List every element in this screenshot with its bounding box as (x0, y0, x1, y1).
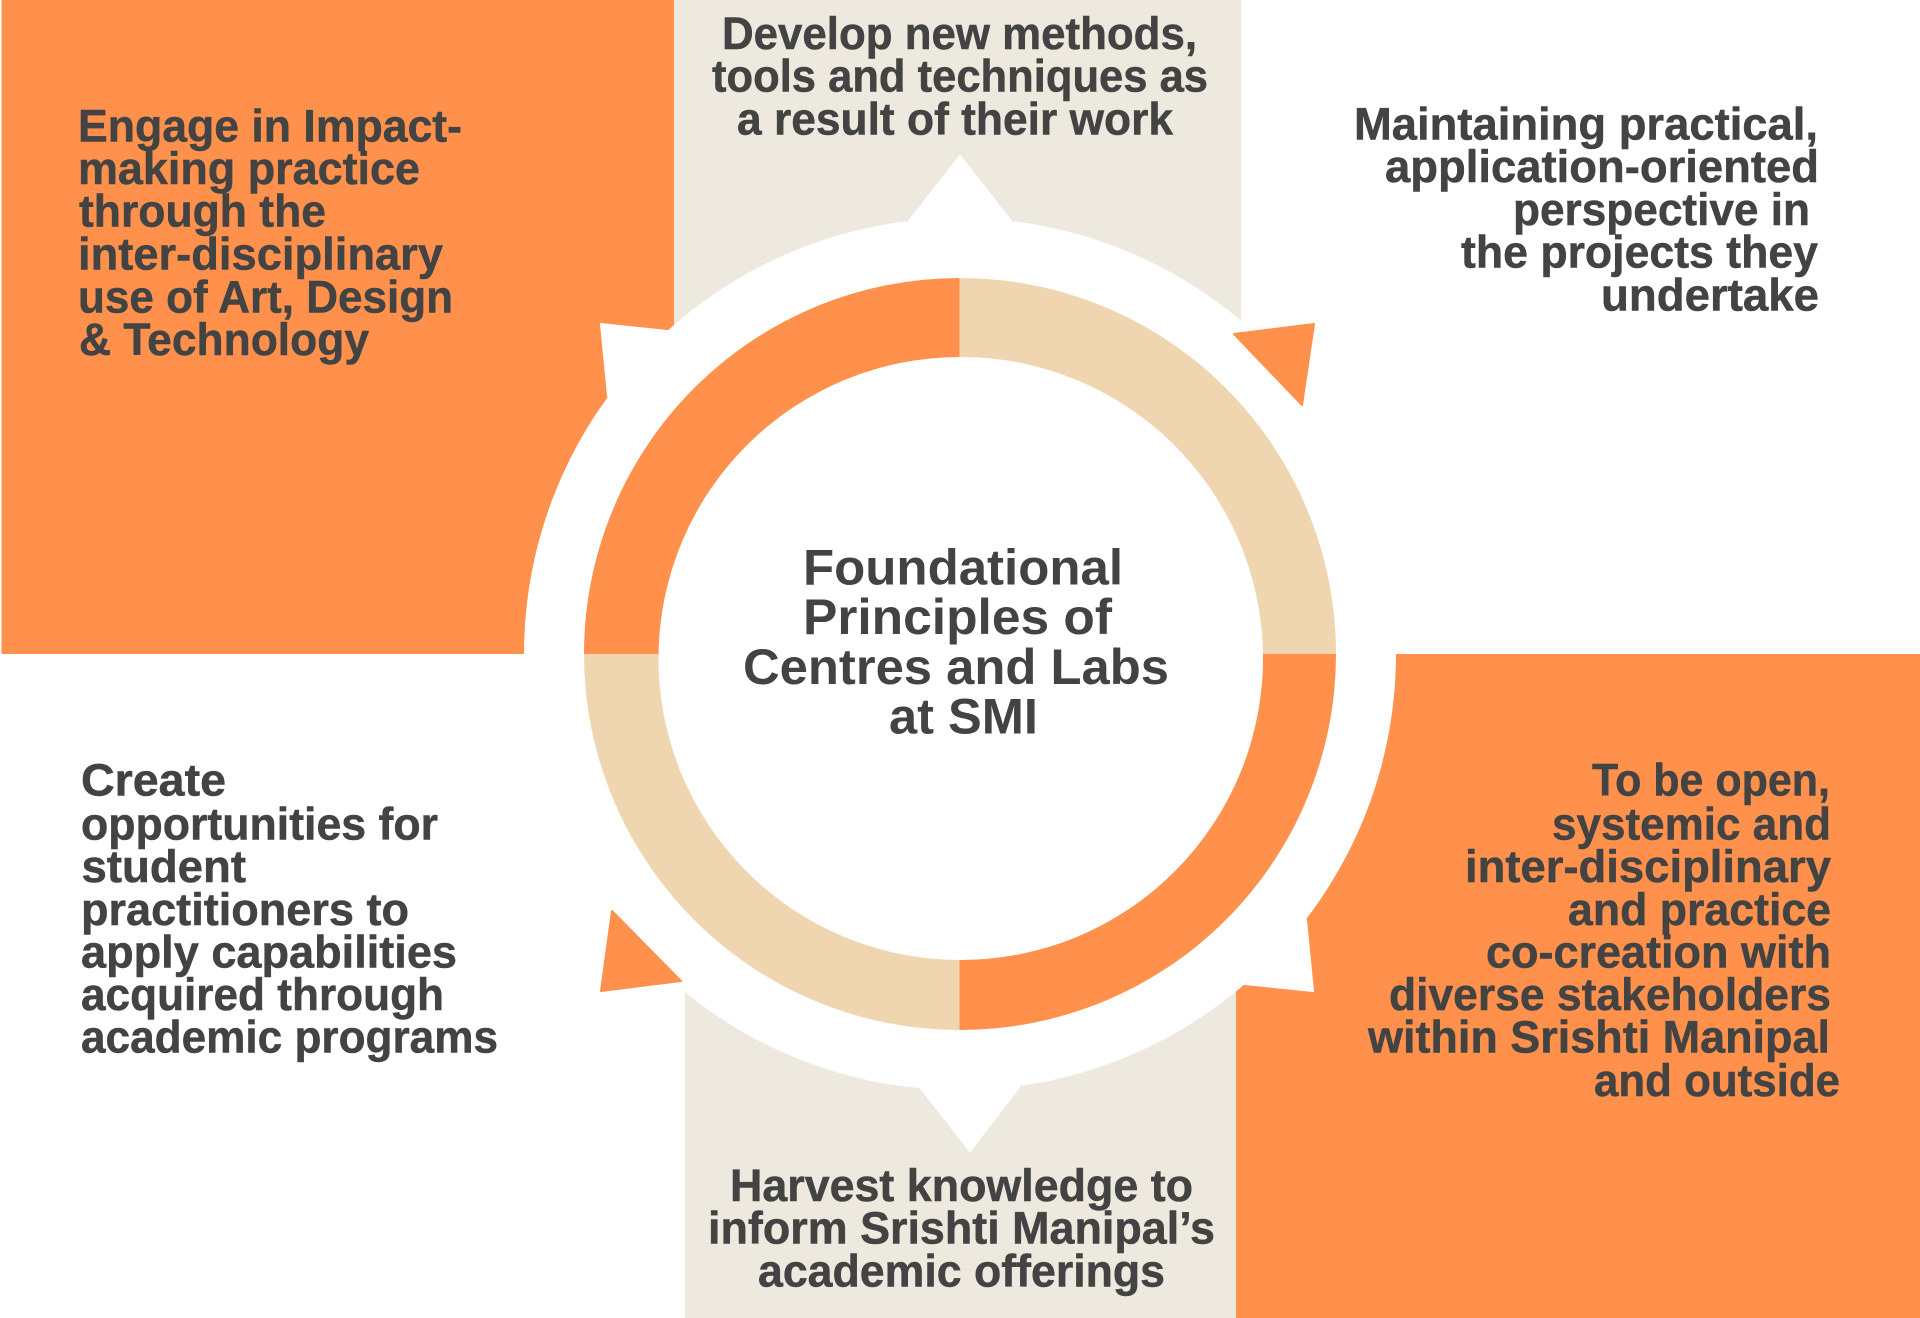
text block: top principle: a result of their work (737, 93, 1174, 144)
text block: top-left principle: making practice (78, 143, 420, 194)
text block: bottom principle: academic offerings (758, 1246, 1165, 1297)
text block: bottom-right principle: diverse stakeholders (1389, 969, 1831, 1020)
title: centre heading: Foundational (803, 539, 1123, 595)
text block: bottom-right principle: inter-disciplinary (1465, 841, 1832, 892)
text block: bottom-left principle: practitioners to (81, 884, 409, 935)
text block: bottom principle (708, 1160, 1215, 1297)
text block: top principle: tools and techniques as (712, 51, 1208, 102)
title: centre heading: Principles of (803, 589, 1112, 645)
text block: top principle (712, 8, 1208, 144)
text block: top-left principle: through the (79, 186, 326, 237)
text block: top-right principle: perspective in (1513, 184, 1810, 235)
text block: bottom-right principle: systemic and (1552, 798, 1831, 850)
panel: bottom beige (685, 950, 1236, 1318)
text block: top-right principle: the projects they (1461, 227, 1819, 278)
arrow: top-left white (601, 324, 667, 396)
arrow: top-right orange (1234, 324, 1314, 405)
title: centre heading: Centres and Labs (743, 639, 1169, 695)
text block: bottom-right principle: co-creation with (1486, 926, 1831, 977)
text block: top principle: Develop new methods, (722, 8, 1197, 59)
text block: bottom-left principle: opportunities for (81, 798, 438, 850)
text block: bottom-left principle: acquired through (81, 969, 444, 1020)
text block: top-left principle: inter-disciplinary (78, 228, 444, 279)
arrow: bottom-right white (1245, 920, 1313, 991)
text block: bottom principle: Harvest knowledge to (730, 1160, 1193, 1211)
arrow: bottom-left orange (601, 911, 681, 991)
text block: top-left principle: & Technology (79, 314, 370, 365)
panel: top beige (674, 0, 1241, 400)
text block: bottom principle: inform Srishti Manipal’s (708, 1203, 1215, 1254)
title: centre heading: at SMI (889, 688, 1038, 744)
ring segment: top-right tan (960, 278, 1336, 654)
text block: top-left principle: use of Art, Design (78, 271, 453, 322)
ring segment: bottom-left tan (584, 654, 960, 1030)
text block: bottom-left principle: apply capabilities (81, 926, 457, 977)
text block: bottom-left principle: Create (81, 755, 226, 806)
text block: bottom-left principle: student (82, 841, 246, 892)
ring chart (584, 278, 1336, 1030)
text block: top-right principle: undertake (1601, 270, 1819, 321)
text block: bottom-left principle: academic programs (81, 1012, 498, 1063)
white disc behind the ring (524, 218, 1396, 1090)
title: centre heading (743, 539, 1169, 744)
ring segment: top-left orange (584, 278, 960, 654)
ring segment: bottom-right orange (960, 654, 1336, 1030)
panel: bottom-right orange (1236, 654, 1920, 1318)
text block: bottom-left principle (81, 755, 498, 1063)
text block: bottom-right principle: and outside (1594, 1055, 1840, 1106)
text block: bottom-right principle (1367, 755, 1840, 1106)
arrow: top white (909, 156, 1011, 221)
text block: top-left principle: Engage in Impact- (78, 101, 462, 152)
text block: bottom-right principle: To be open, (1592, 755, 1830, 806)
text block: top-right principle (1354, 98, 1819, 321)
panel: top-left orange (2, 0, 674, 654)
text block: top-left principle (78, 101, 462, 365)
text block: top-right principle: Maintaining practical, (1354, 98, 1818, 149)
text block: bottom-right principle: within Srishti Manipal (1367, 1012, 1830, 1063)
arrow: bottom white (920, 1087, 1019, 1151)
text block: top-right principle: application-oriented (1385, 141, 1819, 192)
text block: bottom-right principle: and practice (1568, 884, 1831, 935)
